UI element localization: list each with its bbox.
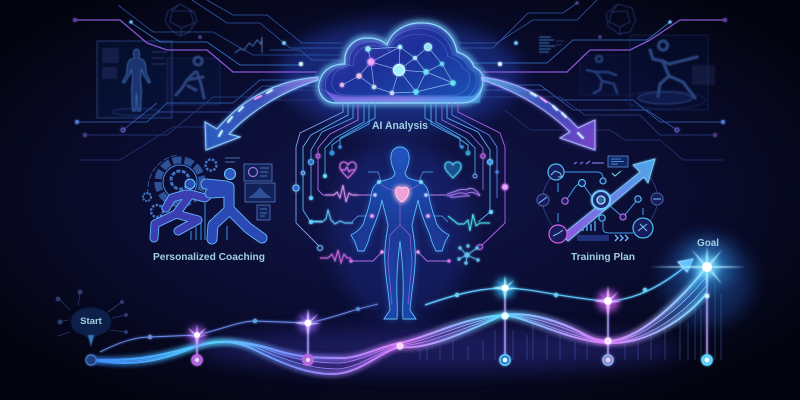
icon: glowing heart [396, 187, 409, 202]
circuit nodes: upper data lines [73, 2, 727, 137]
icon group: training plan [537, 156, 663, 243]
icon: large gear [148, 155, 202, 204]
text lines block [539, 37, 555, 52]
progress bar [577, 235, 609, 241]
timeline baseline right segment [400, 359, 730, 361]
small dashboard panels [244, 164, 275, 220]
timeline connectors [197, 267, 707, 360]
timeline baseline [52, 359, 735, 361]
chart: ECG magenta [320, 250, 351, 263]
panel: left data screens [97, 4, 262, 118]
chart: ECG blue [310, 210, 353, 224]
chevrons [615, 235, 628, 241]
icon: lunging athlete [650, 41, 697, 98]
label: Personalized Coaching: Personalized Coaching [153, 251, 265, 263]
start marker [56, 290, 128, 347]
small tag marks [574, 161, 604, 164]
cloud [319, 23, 483, 103]
star: milestone 3 [492, 276, 518, 300]
icon: molecule network [458, 245, 479, 264]
icon: cyan heart monitor [445, 162, 461, 178]
connector lines [558, 172, 643, 233]
icon group: personalized coaching [143, 155, 275, 241]
chart: small line chart [235, 37, 262, 53]
label: Training Plan: Training Plan [571, 251, 635, 263]
faint outer ring [543, 172, 657, 234]
figure: coach outline [206, 168, 262, 239]
hub node [592, 191, 610, 209]
body vessels [382, 185, 418, 305]
milestone nodes [86, 294, 712, 365]
big diagonal arrow [562, 159, 655, 241]
icon: faded runner figure [176, 57, 204, 98]
icon: small gears [143, 160, 216, 217]
icon: network sphere [606, 4, 636, 35]
check mark [612, 171, 621, 176]
label: Goal: Goal [697, 238, 719, 249]
chart: ECG cyan [448, 214, 490, 231]
icon: pink heart monitor [340, 162, 356, 178]
icon: runner figure [587, 56, 617, 93]
circuit lines: left [75, 0, 343, 160]
star: milestone 2 [295, 309, 321, 336]
ground line [143, 240, 270, 242]
star: milestone 1 [186, 325, 208, 345]
circuit lines: cloud to body [296, 103, 505, 261]
star: goal [650, 245, 745, 290]
circuit nodes around body [293, 145, 508, 263]
document card [608, 156, 628, 167]
arrow: cloud to personalized coaching [205, 77, 318, 150]
plan nodes [537, 164, 663, 243]
label: Start: Start [80, 316, 103, 327]
timeline wave ribbon [91, 267, 707, 374]
arrow: cloud to training plan [482, 77, 595, 150]
chart: wave signal [447, 188, 480, 197]
icon: network sphere [165, 4, 197, 36]
ambient glow [200, 20, 752, 372]
circuit lines: right [458, 0, 725, 160]
upper progress line with arrow [100, 259, 693, 352]
star: milestone 4 [594, 286, 622, 316]
chart: ECG pink [325, 185, 358, 202]
label: AI Analysis: AI Analysis [372, 120, 428, 132]
icon: human scan figure [122, 49, 150, 111]
chart: mini bars [583, 221, 595, 231]
network in cloud [342, 47, 453, 93]
progress bars behind timeline [420, 282, 721, 360]
figure: runner outline [154, 179, 212, 238]
panel: right data screens [539, 4, 715, 110]
chart: coaching bars [191, 203, 227, 240]
human body figure [351, 147, 449, 319]
